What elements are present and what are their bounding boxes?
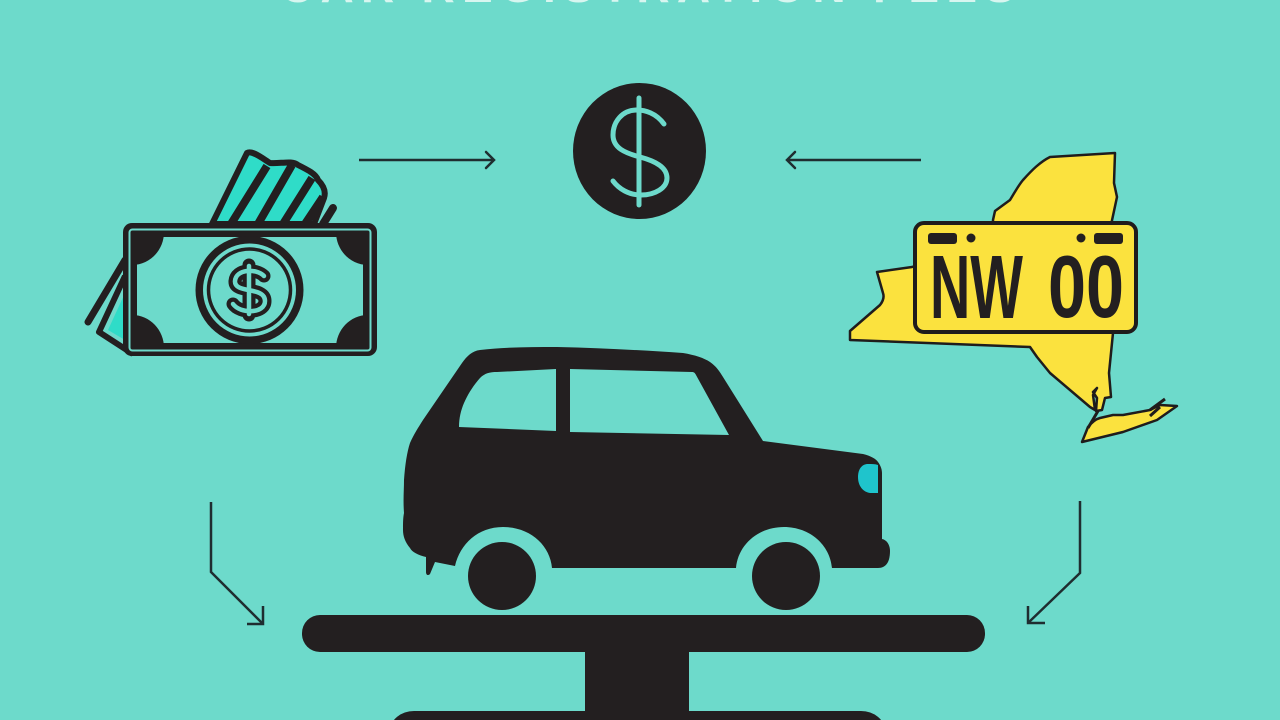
arrow: cash to dollar coin (359, 152, 494, 168)
rear wheel (468, 542, 536, 610)
headlight (858, 464, 878, 493)
front side window (570, 369, 729, 435)
arrow: cash down to platform (211, 502, 263, 624)
Long Island (1082, 405, 1177, 442)
platform stem (585, 652, 689, 712)
rear side window (459, 369, 556, 431)
back bills, upper fan (212, 152, 333, 224)
platform stand (302, 615, 985, 720)
arrow: New York to dollar coin (787, 152, 921, 168)
car body (403, 347, 890, 575)
icon: New York state with licence plate (850, 153, 1177, 442)
front wheel (752, 542, 820, 610)
icon: car silhouette (403, 347, 890, 610)
platform base (390, 711, 885, 720)
licence plate (915, 223, 1136, 338)
icon: stack of banknotes (88, 152, 377, 356)
front bill body (123, 223, 377, 356)
arrow: New York down to platform (1028, 501, 1080, 623)
back bills, lower fan (88, 260, 133, 354)
icon: central dollar coin (573, 83, 706, 219)
Long Island forks (1088, 399, 1165, 428)
New York state mainland (850, 153, 1117, 411)
bill medallion with dollar sign (196, 236, 304, 344)
licence plate: 00 (1048, 237, 1124, 336)
licence plate: NW (930, 238, 1023, 338)
platform top bar (302, 615, 985, 652)
